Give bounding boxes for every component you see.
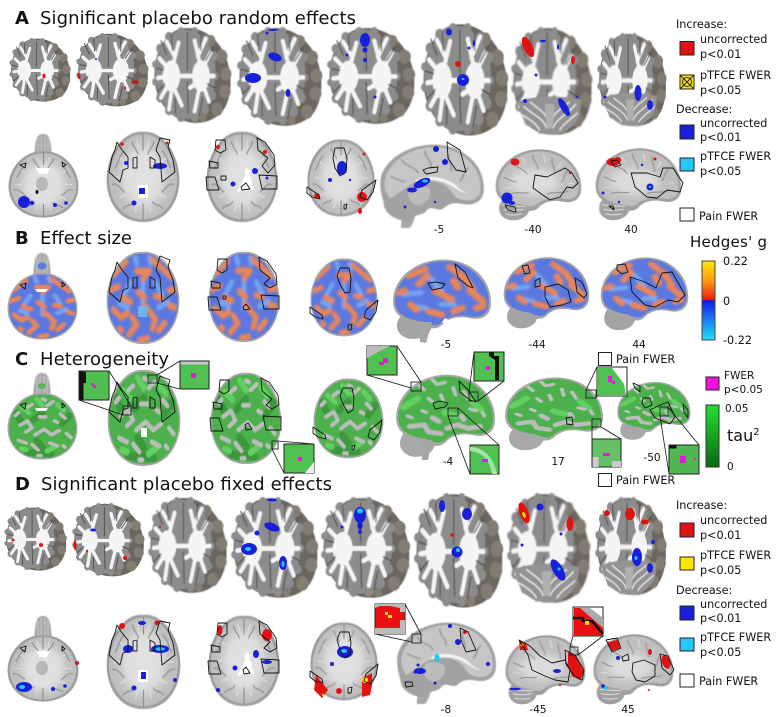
legend D: p<0.01 [700,529,741,542]
zoom inset callouts with magenta voxels [79,346,699,474]
slice coordinate labels C: 17 [551,456,565,468]
sagittal slices row A [380,142,683,228]
legend: tau squared colour bar: 0 [727,461,734,473]
heading B: B [15,228,29,249]
legend A: uncorrected [700,33,767,46]
axial slices row D [8,615,378,709]
legend: Hedges' g colour bar: -0.22 [723,334,752,347]
legend: tau squared colour bar: tau [727,426,753,445]
legend: tau squared colour bar: 2 [753,427,760,438]
coronal slices row A [9,23,667,136]
slice coordinate labels B [441,339,646,351]
legend A: p<0.01 [700,48,741,61]
heading B: Effect size [40,228,132,249]
slice coordinate labels C [443,452,661,468]
legend A: Pain FWER [699,210,758,223]
legend: Hedges' g colour bar: 0 [723,295,730,308]
legend A: Decrease: [676,103,732,116]
legend: tau squared colour bar: p<0.05 [724,384,763,396]
slice coordinate labels B: -5 [441,339,451,351]
axial heterogeneity maps [5,368,386,468]
legend A: p<0.05 [700,165,741,178]
heading A: Significant placebo random effects [40,8,356,29]
panel D: significant placebo fixed effects [4,474,771,716]
slice coordinate labels D: -45 [529,704,547,716]
legend: Hedges' g colour bar: Hedges' g [690,233,767,251]
panel C: heterogeneity [5,346,763,487]
zoom inset callouts with red voxels [375,604,603,655]
panel B: effect size [5,228,767,351]
heading D: Significant placebo fixed effects [41,474,332,495]
heading C: C [15,349,28,370]
slice coordinate labels A [434,224,638,236]
legend D: Pain FWER [699,675,758,688]
legend: tau squared colour bar [706,370,763,473]
slice coordinate labels D [441,704,635,716]
legend A: pTFCE FWER [700,150,771,163]
slice coordinate labels B: 44 [632,339,646,351]
legend D: Decrease: [676,584,732,597]
pain FWER keys C: Pain FWER [616,353,675,366]
pain FWER keys C [598,352,675,487]
heading C: Heterogeneity [40,349,169,370]
legend D: pTFCE FWER [700,631,771,644]
slice coordinate labels C: -4 [443,456,454,468]
pain FWER keys C: Pain FWER [616,474,675,487]
legend D: p<0.05 [700,564,741,577]
slice coordinate labels A: -5 [434,224,444,236]
legend D [676,499,771,688]
legend D: uncorrected [700,514,767,527]
panel A: significant placebo random effects [9,8,771,236]
slice coordinate labels A: 40 [624,224,638,236]
sagittal heterogeneity maps [393,372,692,460]
sagittal slices row D [397,623,674,704]
legend A: p<0.01 [700,131,741,144]
legend A: Increase: [676,18,727,31]
legend D: Increase: [676,499,727,512]
slice coordinate labels D: -8 [441,704,451,716]
slice coordinate labels A: -40 [524,224,542,236]
slice coordinate labels B: -44 [528,339,546,351]
legend: Hedges' g colour bar: 0.22 [723,255,748,268]
sagittal effect size maps [390,255,690,343]
slice coordinate labels D: 45 [621,704,635,716]
legend: tau squared colour bar: FWER [724,370,754,382]
heading D: D [15,474,30,495]
coronal slices row D [4,493,667,607]
axial effect size maps [5,250,380,346]
legend D: pTFCE FWER [700,549,771,562]
legend D: p<0.01 [700,612,741,625]
heading A: A [15,8,29,29]
legend: Hedges' g colour bar [690,233,767,347]
legend D: p<0.05 [700,646,741,659]
legend A: p<0.05 [700,84,741,97]
legend D: uncorrected [700,598,767,611]
legend A: uncorrected [700,117,767,130]
axial slices row A [9,132,376,222]
legend A [676,18,771,223]
legend: tau squared colour bar: 0.05 [725,403,748,415]
slice coordinate labels C: -50 [643,452,661,464]
legend A: pTFCE FWER [700,69,771,82]
